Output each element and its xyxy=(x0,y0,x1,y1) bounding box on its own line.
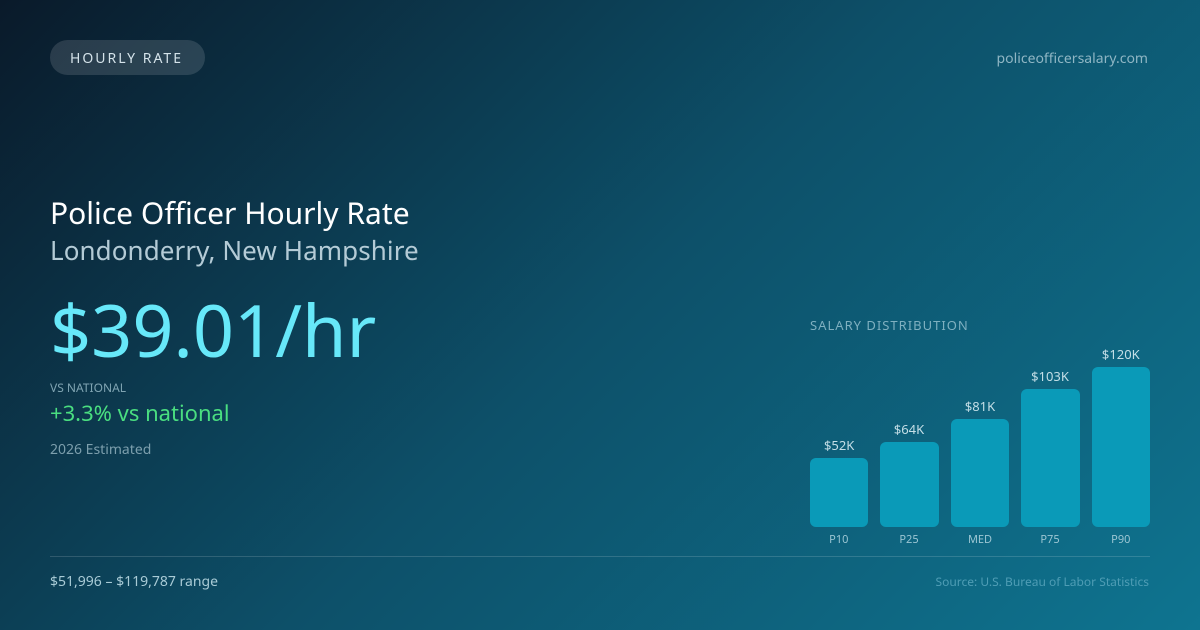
axis median: MED xyxy=(968,532,992,547)
site name: policeofficersalary.com xyxy=(997,49,1148,68)
salary range: $51,996 – $119,787 range xyxy=(50,572,218,591)
bar P10 xyxy=(810,458,868,527)
value P25: $64K xyxy=(894,420,924,438)
axis P90: P90 xyxy=(1111,532,1130,547)
axis P25: P25 xyxy=(899,532,919,547)
axis P10: P10 xyxy=(829,532,848,547)
bar median xyxy=(951,419,1009,527)
headline hourly rate: $39.01/hr xyxy=(50,281,376,379)
value P75: $103K xyxy=(1031,367,1069,385)
subtitle: location: Londonderry, New Hampshire xyxy=(50,232,419,268)
value P10: $52K xyxy=(824,436,854,454)
chart heading: SALARY DISTRIBUTION xyxy=(810,316,969,334)
badge label: HOURLY RATE xyxy=(70,49,183,68)
title: Police Officer Hourly Rate xyxy=(50,192,410,233)
label: vs national: VS NATIONAL xyxy=(50,379,126,396)
bar P75 xyxy=(1021,389,1080,527)
estimate note: 2026 Estimated xyxy=(50,440,151,459)
bar P25 xyxy=(880,442,939,527)
source: Source: U.S. Bureau of Labor Statistics xyxy=(936,573,1149,590)
axis P75: P75 xyxy=(1040,532,1060,547)
value median: $81K xyxy=(965,397,995,415)
national comparison: +3.3% vs national xyxy=(50,398,230,428)
value P90: $120K xyxy=(1102,345,1140,363)
bar P90 xyxy=(1092,367,1150,527)
badge: hourly rate xyxy=(50,40,205,75)
